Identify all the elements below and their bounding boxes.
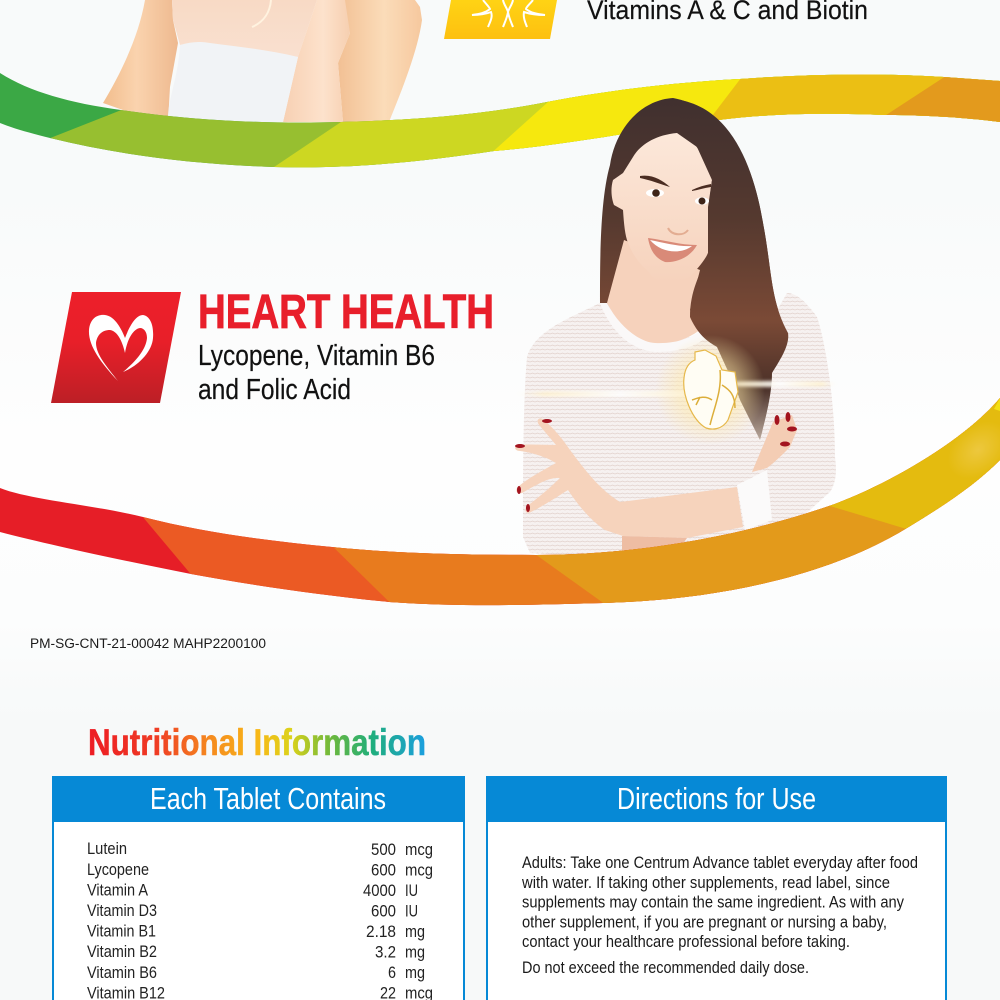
right hand bbox=[752, 415, 797, 472]
nutrient names bbox=[87, 839, 165, 1000]
lens flare bbox=[510, 381, 840, 397]
directions text: other supplement, if you are pregnant or nursing a baby, bbox=[522, 914, 887, 932]
nutrient names: Lutein bbox=[87, 839, 127, 858]
photo: woman with white top bbox=[103, 0, 422, 122]
nutrient amounts: 500 bbox=[371, 840, 396, 859]
photo: smiling woman with glowing heart bbox=[510, 98, 840, 555]
text: heart nutrients bbox=[198, 340, 435, 406]
directions text: with water. If taking other supplements, read label, since bbox=[521, 874, 890, 892]
nutrient amounts: 4000 bbox=[363, 881, 396, 900]
collar bbox=[600, 303, 708, 352]
sweater cuff bbox=[737, 470, 772, 530]
panel: directions for use bbox=[486, 776, 947, 1000]
nutrient amounts: 600 bbox=[371, 860, 396, 880]
heading: heart health: HEART HEALTH bbox=[198, 286, 494, 339]
nutrient names: Vitamin A bbox=[87, 880, 149, 900]
nutrient names: Vitamin D3 bbox=[87, 901, 157, 920]
nutrient amounts: 2.18 bbox=[366, 922, 396, 941]
nutrient units: mg bbox=[405, 942, 425, 962]
nutrient units: mcg bbox=[405, 860, 433, 880]
nose bbox=[668, 228, 688, 234]
nutrient units bbox=[405, 840, 433, 1000]
left arm bbox=[103, 0, 178, 122]
under forearm bbox=[622, 536, 687, 552]
text: reference code: PM-SG-CNT-21-00042 MAHP2200100 bbox=[30, 636, 266, 651]
nutrient names: Vitamin B1 bbox=[87, 922, 156, 940]
necklace glint bbox=[252, 0, 271, 27]
nutrient units: mg bbox=[405, 922, 425, 941]
icon: heart health tile bbox=[51, 292, 181, 403]
panel: each tablet contains bbox=[52, 776, 465, 1000]
nutrient units: IU bbox=[405, 881, 418, 900]
nutrient amounts: 3.2 bbox=[375, 942, 396, 962]
text: heart nutrients: and Folic Acid bbox=[198, 374, 351, 406]
eyebrows bbox=[640, 176, 711, 191]
directions text: supplements may contain the same ingredient. As with any bbox=[522, 894, 905, 912]
hair front lock bbox=[680, 100, 788, 440]
panel header bbox=[52, 776, 465, 822]
chest bbox=[172, 0, 317, 57]
hair back bbox=[600, 98, 788, 440]
white top bbox=[168, 42, 298, 122]
smile bbox=[648, 238, 697, 262]
directions text bbox=[521, 854, 918, 977]
green to amber ribbon bbox=[0, 73, 1000, 168]
panel title: Directions for Use bbox=[617, 781, 816, 816]
sweater bbox=[523, 293, 836, 555]
nutrient units: IU bbox=[405, 902, 418, 920]
directions text: Adults: Take one Centrum Advance tablet everyday after food bbox=[522, 854, 918, 872]
red to gold ribbon bbox=[0, 398, 1000, 606]
heading: nutritional information: Nutritional Information bbox=[88, 722, 426, 763]
panel title: Each Tablet Contains bbox=[150, 781, 386, 816]
nutrient amounts bbox=[363, 840, 396, 1000]
nutrient amounts: 600 bbox=[371, 902, 396, 920]
nutrient names: Lycopene bbox=[87, 860, 149, 879]
nails bbox=[515, 412, 797, 512]
nutrient units: mcg bbox=[405, 840, 433, 859]
neck bbox=[607, 240, 702, 345]
hand and forearm bbox=[515, 419, 743, 538]
text: heart nutrients: Lycopene, Vitamin B6 bbox=[198, 340, 435, 372]
panel header bbox=[486, 776, 947, 822]
glow behind heart bbox=[655, 335, 765, 445]
nutrient amounts: 6 bbox=[388, 963, 396, 982]
centre arm bbox=[283, 0, 350, 122]
eyes bbox=[646, 189, 709, 205]
face bbox=[611, 133, 712, 283]
icon: anatomical heart bbox=[684, 350, 738, 429]
nutrient names: Vitamin B6 bbox=[87, 963, 157, 982]
icon: kidneys on yellow tile bbox=[444, 0, 557, 39]
nutrient names: Vitamin B2 bbox=[87, 942, 157, 961]
right arm bbox=[338, 0, 422, 122]
directions text: Do not exceed the recommended daily dose. bbox=[522, 959, 809, 977]
directions text: contact your healthcare professional before taking. bbox=[522, 933, 850, 951]
nutrient units: mg bbox=[405, 963, 425, 982]
